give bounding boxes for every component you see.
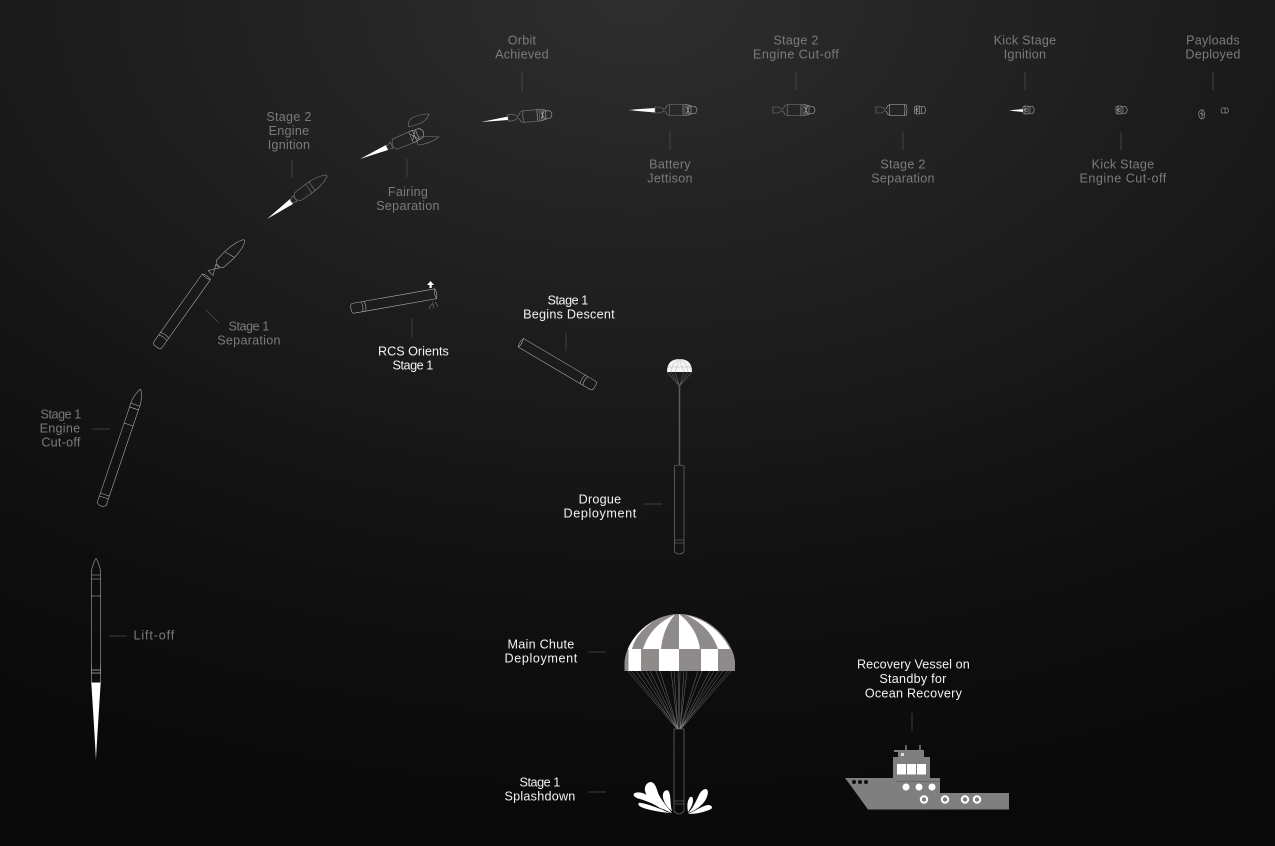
label line: fairing separation [406, 159, 408, 177]
kick stage engine cut-off [1116, 106, 1127, 114]
label: kick stage ignition [994, 34, 1056, 62]
label: stage 2 engine cut-off: Engine Cut-off [753, 48, 839, 62]
label line: begins descent [565, 333, 567, 351]
label: payloads deployed: Payloads [1186, 34, 1240, 48]
label: orbit achieved: Orbit [508, 34, 537, 48]
label: drogue deployment [564, 492, 637, 520]
payloads deployed [1199, 108, 1228, 119]
label line: main chute [588, 651, 606, 653]
label: stage 1 splashdown: Splashdown [504, 790, 576, 804]
label: kick stage engine cut-off: Engine Cut-off [1080, 172, 1167, 186]
stage 2 engine cut-off rocket [773, 104, 815, 116]
suspension lines [628, 671, 731, 729]
label line: kick ignition [1024, 72, 1026, 90]
label: stage 1 engine cut-off: Engine [40, 422, 80, 436]
label: main chute deployment: Main Chute [508, 638, 574, 652]
label: kick stage engine cut-off: Kick Stage [1092, 158, 1154, 172]
label: drogue deployment: Drogue [579, 492, 621, 506]
label: recovery vessel [857, 658, 970, 700]
label: stage 1 separation [217, 320, 281, 348]
stage 1 separation rockets [152, 236, 248, 350]
label line: kick cut-off [1120, 132, 1122, 150]
label: stage 2 separation: Separation [871, 172, 935, 186]
label line: stage 2 cut-off [795, 72, 797, 90]
label: drogue deployment: Deployment [564, 506, 637, 520]
label line: battery jettison [669, 131, 671, 150]
label: stage 1 begins descent: Begins Descent [523, 308, 615, 322]
label: payloads deployed: Deployed [1185, 48, 1241, 62]
label: kick stage ignition: Kick Stage [994, 34, 1056, 48]
label line: stage 1 separation [206, 310, 219, 323]
label: RCS orients stage 1: RCS Orients [378, 344, 449, 358]
label: recovery vessel: Recovery Vessel on [857, 658, 970, 672]
label: RCS orients stage 1: Stage 1 [392, 358, 434, 372]
label: fairing separation: Separation [376, 199, 440, 213]
label: main chute deployment: Deployment [504, 652, 578, 666]
lift-off rocket [91, 559, 101, 760]
label line: RCS [411, 319, 413, 337]
label line: payloads deployed [1212, 72, 1214, 90]
fairing separation rocket [360, 114, 439, 159]
label: RCS orients stage 1 [378, 344, 449, 372]
label: battery jettison: Battery [649, 158, 691, 172]
drogue parachute and booster [667, 359, 692, 554]
label line: engine cut-off [92, 428, 110, 430]
stage 2 separation [876, 104, 926, 116]
kick stage ignition [1008, 106, 1034, 114]
label: stage 2 engine ignition [266, 110, 312, 152]
label: recovery vessel: Ocean Recovery [865, 686, 963, 700]
label line: recovery vessel [911, 713, 913, 731]
label: stage 1 begins descent [523, 294, 615, 322]
main parachute [624, 614, 735, 729]
battery jettison rocket [627, 104, 697, 116]
label: stage 1 engine cut-off: Cut-off [41, 436, 81, 450]
label: fairing separation [376, 185, 440, 213]
label line: orbit achieved [521, 72, 523, 92]
label line: drogue [643, 503, 662, 505]
label: recovery vessel: Standby for [879, 672, 947, 686]
label: stage 2 engine ignition: Ignition [268, 138, 310, 152]
label: orbit achieved [495, 34, 549, 62]
label line: stage 2 separation [902, 132, 904, 150]
label: stage 1 engine cut-off [40, 408, 82, 450]
label: orbit achieved: Achieved [495, 48, 549, 62]
label: fairing separation: Fairing [388, 185, 428, 199]
label: payloads deployed [1185, 34, 1241, 62]
label: stage 2 engine ignition: Stage 2 [266, 110, 312, 124]
label: stage 2 engine cut-off: Stage 2 [773, 34, 819, 48]
label: stage 2 engine ignition: Engine [269, 124, 309, 138]
stage 2 ignition rocket [267, 171, 330, 219]
stage 1 begins descent booster [517, 338, 597, 391]
label: stage 1 splashdown [504, 776, 576, 804]
label: main chute deployment [504, 638, 578, 666]
RCS orients stage 1 booster [350, 281, 438, 314]
label: battery jettison [647, 158, 693, 186]
label: kick stage ignition: Ignition [1004, 48, 1046, 62]
label: stage 1 splashdown: Stage 1 [520, 776, 560, 790]
label: stage 1 engine cut-off: Stage 1 [40, 408, 82, 422]
label: battery jettison: Jettison [647, 172, 693, 186]
label: stage 2 separation: Stage 2 [880, 158, 926, 172]
label: stage 2 separation [871, 158, 935, 186]
label: stage 1 separation: Stage 1 [228, 320, 270, 334]
label: stage 1 begins descent: Stage 1 [548, 294, 588, 308]
label: lift-off: Lift-off [134, 628, 175, 642]
label: stage 2 engine cut-off [753, 34, 839, 62]
stage 1 engine cut-off rocket [97, 388, 145, 508]
splashdown booster and water [634, 729, 712, 814]
label line: lift-off [109, 635, 127, 637]
label line: stage 2 ignition [291, 160, 293, 178]
orbit achieved rocket [481, 108, 552, 124]
canopy [624, 614, 735, 671]
label: stage 1 separation: Separation [217, 334, 281, 348]
label line: splashdown [588, 791, 606, 793]
label: kick stage engine cut-off [1080, 158, 1167, 186]
recovery vessel [845, 745, 1009, 810]
